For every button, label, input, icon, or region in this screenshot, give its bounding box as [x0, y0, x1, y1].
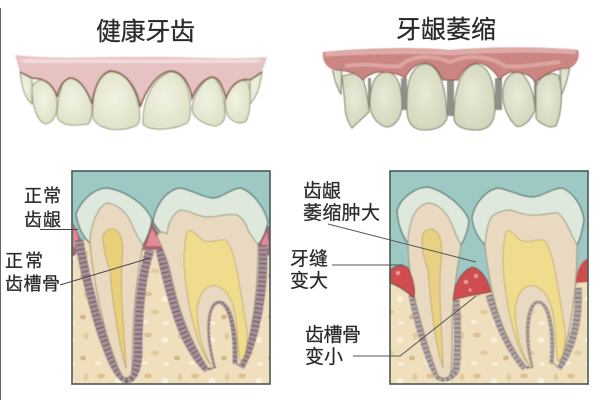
label: wider tooth gap: 牙缝: [290, 248, 328, 270]
title: gum recession: 牙龈萎缩: [396, 16, 496, 44]
periodontal band: [412, 288, 578, 378]
illustration: healthy upper teeth: [15, 55, 267, 130]
label: normal alveolar bone: 齿槽骨: [5, 274, 60, 294]
panel background: [390, 171, 588, 384]
gum: normal: [72, 222, 270, 256]
label: smaller alveolar bone: 变小: [305, 346, 343, 368]
label: swollen receding gum: [303, 180, 476, 262]
panel: healthy tooth cross-section: [72, 171, 270, 384]
label: normal gum: 正常: [24, 186, 61, 206]
label: normal gum: 齿龈: [24, 210, 61, 230]
molar: [153, 188, 268, 245]
title: healthy teeth: 健康牙齿: [96, 18, 195, 46]
panel: receded gum tooth cross-section: [390, 171, 588, 384]
illustration: receded gum upper teeth: [323, 47, 579, 130]
premolar: [397, 187, 469, 245]
label: smaller alveolar bone: 齿槽骨: [305, 324, 361, 346]
label: smaller alveolar bone: [305, 296, 476, 368]
panel border: [72, 171, 270, 384]
label: swollen receding gum: 齿龈: [303, 180, 341, 202]
panel border: [390, 171, 588, 384]
panel background: [72, 171, 270, 384]
label: wider tooth gap: [290, 248, 403, 292]
label: normal gum: [24, 186, 78, 230]
molar: [472, 188, 584, 246]
label: normal alveolar bone: [5, 251, 150, 294]
label: normal alveolar bone: 正常: [5, 251, 43, 271]
periodontal band: [79, 240, 263, 379]
page edge line: [0, 8, 1, 400]
label: swollen receding gum: 萎缩肿大: [303, 202, 380, 224]
label: wider tooth gap: 变大: [290, 270, 328, 292]
premolar: [76, 188, 152, 245]
gum: swollen: [390, 266, 415, 298]
